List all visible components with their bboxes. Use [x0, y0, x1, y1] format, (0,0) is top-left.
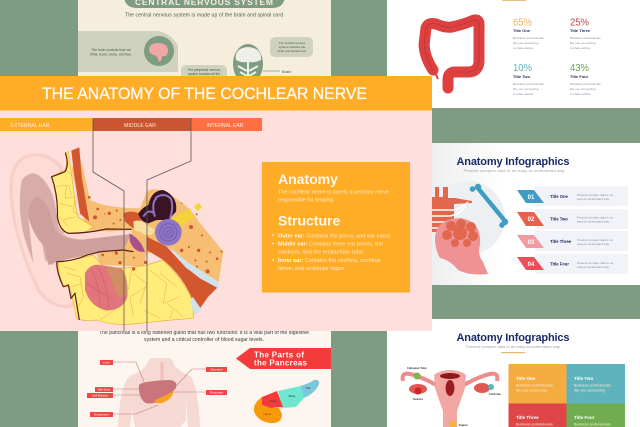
rows: 03	[528, 240, 535, 246]
stats: 65%	[513, 18, 532, 28]
structure list: eardrum, and the eustachian tube	[278, 250, 363, 256]
panel: central nervous system slide	[78, 0, 331, 85]
rows: Title Four	[550, 262, 569, 266]
structure list: nerve, and vestibular organ.	[278, 266, 346, 272]
rows: Title One	[550, 194, 569, 199]
pancreas parts diagram	[254, 380, 319, 423]
stats: Business professionals	[570, 36, 601, 40]
tile grid: Title Three	[516, 415, 539, 420]
tile grid: like you connecting	[516, 388, 547, 392]
lower canal outline	[57, 250, 133, 262]
stats: Business professionals	[513, 36, 544, 40]
tile grid: Business professionals	[574, 422, 611, 426]
tile grid: Business professionals	[574, 384, 611, 388]
title banner	[0, 76, 432, 110]
section pointer lines	[93, 118, 191, 331]
stats: like you connecting	[513, 87, 539, 91]
parotid gland	[85, 265, 127, 311]
panel: pancreas slide: Pancreas	[210, 390, 223, 394]
tile grid: Business professionals	[516, 384, 553, 388]
anatomy text: The cochlear nerve is purely a sensory nerve	[278, 190, 389, 196]
rows: Present complex data in an	[577, 216, 614, 220]
rows: 01	[528, 195, 535, 201]
rows: Title Three	[550, 239, 572, 244]
icon: uterus: Vagina	[458, 423, 468, 427]
stats: 10%	[513, 63, 532, 74]
cochlea	[155, 219, 182, 246]
icon: uterus: Ovaries	[413, 397, 424, 401]
stats: Business professionals	[513, 82, 544, 86]
icon: uterus: Fimbriae	[489, 392, 501, 396]
rows: Present complex data in an	[577, 261, 614, 265]
pale canal band	[58, 230, 132, 239]
anatomy text	[278, 190, 389, 204]
panel: cochlear nerve main slide	[0, 76, 432, 331]
lower red vessel	[147, 237, 218, 311]
panel: anatomy infographics uterus slide: Present complex data in an easy-to-understand way	[466, 344, 560, 349]
pancreas parts diagram: Head	[263, 412, 271, 416]
yellow lower tissue	[58, 255, 193, 324]
anatomy text: responsible for hearing.	[278, 198, 335, 204]
stats: Title One	[513, 28, 531, 33]
rows: Title Two	[550, 216, 568, 222]
rows: easy-to-understand way.	[577, 220, 610, 224]
ear section tabs: MIDDLE EAR	[124, 123, 156, 129]
orange bone	[72, 148, 223, 283]
ear drum	[129, 233, 145, 252]
body silhouette	[118, 358, 200, 427]
panel: pancreas slide: The pancreas is a long flattened gland that has two functions: it is a vital part of the digestive	[99, 330, 309, 336]
tile grid: Title Two	[574, 376, 593, 381]
structure list	[272, 233, 390, 272]
panel: pancreas slide: Stomach	[211, 368, 223, 372]
rows: Present complex data in an	[577, 193, 614, 197]
panel: colon slide	[387, 0, 640, 108]
ear section tabs	[0, 118, 262, 131]
panel: central nervous system slide: The central nervous	[279, 41, 306, 45]
rows: Present complex data in an	[577, 238, 614, 242]
tile grid: like you connecting	[574, 388, 605, 392]
rows: easy-to-understand way.	[577, 242, 610, 246]
info box	[262, 162, 410, 292]
rows: easy-to-understand way.	[577, 197, 610, 201]
pancreas organ	[155, 391, 173, 403]
upper canal outline	[52, 153, 132, 233]
stats: 25%	[570, 18, 589, 28]
ear cross-section illustration	[9, 147, 223, 324]
yellow upper tissue	[52, 152, 93, 233]
tile grid: Title One	[516, 376, 536, 381]
panel: central nervous system slide: The peripheral nervous	[188, 68, 221, 72]
panel: anatomy infographics skeleton slide	[387, 143, 640, 285]
stats: Business professionals	[570, 82, 601, 86]
stats: Title Three	[570, 28, 591, 33]
panel: pancreas slide: Gall Bladder	[92, 394, 108, 398]
heading: structure: Structure	[278, 212, 340, 228]
yellow nerve	[172, 208, 194, 230]
concha and ear canal	[20, 173, 144, 265]
stats: to share advice.	[570, 92, 591, 96]
title banner: THE ANATOMY OF THE COCHLEAR NERVE	[42, 84, 367, 103]
rows	[517, 186, 628, 274]
panel: central nervous system slide: Brain	[282, 69, 291, 74]
vestibular dark	[138, 190, 176, 223]
panel: pancreas slide: Bile Duct	[98, 388, 110, 392]
pancreas parts diagram: Neck	[270, 399, 277, 403]
panel: central nervous system slide: think, learn, move, and feel.	[90, 52, 132, 56]
panel: central nervous system slide: The central nervous system is made up of the brain and spinal cord	[125, 12, 283, 18]
stats: Title Two	[513, 74, 531, 79]
panel: pancreas slide: Duodenum	[94, 412, 109, 416]
liver	[139, 380, 176, 404]
panel: anatomy infographics skeleton slide: Anatomy Infographics	[456, 156, 570, 168]
panel: pancreas slide: Liver	[103, 360, 110, 364]
structure list: Middle ear: Contains three ear bones, the	[278, 242, 383, 248]
panel: central nervous system slide: brain and spinal cord.	[278, 49, 307, 53]
panel: pancreas slide: The Parts of	[254, 350, 304, 360]
outer ear pinna	[9, 153, 77, 308]
icon: bone	[470, 184, 508, 228]
icon: skeleton torso	[432, 187, 472, 232]
dots	[88, 196, 223, 273]
stats: like you connecting	[513, 41, 539, 45]
icon: uterus: Fallopian Tube	[407, 366, 427, 370]
pancreas parts diagram: Body	[289, 394, 296, 398]
tile grid: Business professionals	[516, 422, 553, 426]
ear section tabs: INTERNAL EAR	[206, 123, 244, 129]
icon: large intestine	[424, 20, 479, 88]
tile grid: Title Four	[574, 415, 595, 420]
panel: central nervous system slide: system includes all the	[188, 72, 220, 76]
rows: 02	[528, 217, 535, 223]
icon: uterus	[403, 366, 501, 427]
icon: skull	[435, 218, 488, 274]
panel: pancreas slide: the Pancreas	[254, 358, 308, 368]
stats: to share advice.	[513, 92, 534, 96]
stats: 43%	[570, 63, 589, 74]
middle ear ossicles	[123, 212, 143, 228]
stats	[513, 18, 601, 96]
stats: Title Four	[570, 74, 589, 79]
panel: pancreas slide: system and a critical controller of blood sugar levels.	[144, 337, 264, 343]
stats: like you connecting	[570, 87, 596, 91]
structure list: Outer ear: Contains the pinna, and ear canal	[278, 233, 390, 239]
tile grid	[508, 364, 625, 427]
rows: 04	[528, 262, 535, 268]
stats: to share advice.	[570, 46, 591, 50]
red artery upper	[71, 147, 89, 222]
callout tags	[87, 360, 227, 417]
panel: pancreas slide	[78, 325, 331, 427]
panel: central nervous system slide: system includes the	[279, 45, 305, 49]
heading: anatomy: Anatomy	[278, 171, 338, 187]
panel: anatomy infographics uterus slide	[387, 319, 640, 427]
panel: central nervous system slide: The brain controls how we	[91, 48, 131, 52]
stats: to share advice.	[513, 46, 534, 50]
pancreas parts diagram: Tail	[306, 386, 311, 390]
stats: like you connecting	[570, 41, 596, 45]
ear section tabs: EXTERNAL EAR	[10, 123, 50, 129]
panel: anatomy infographics uterus slide: Anatomy Infographics	[456, 332, 570, 344]
panel: anatomy infographics skeleton slide: Present complex data in an easy-to-understand way	[464, 168, 564, 173]
structure list: Inner ear: Contains the cochlea, cochlear	[278, 258, 381, 264]
rows: easy-to-understand way.	[577, 265, 610, 269]
